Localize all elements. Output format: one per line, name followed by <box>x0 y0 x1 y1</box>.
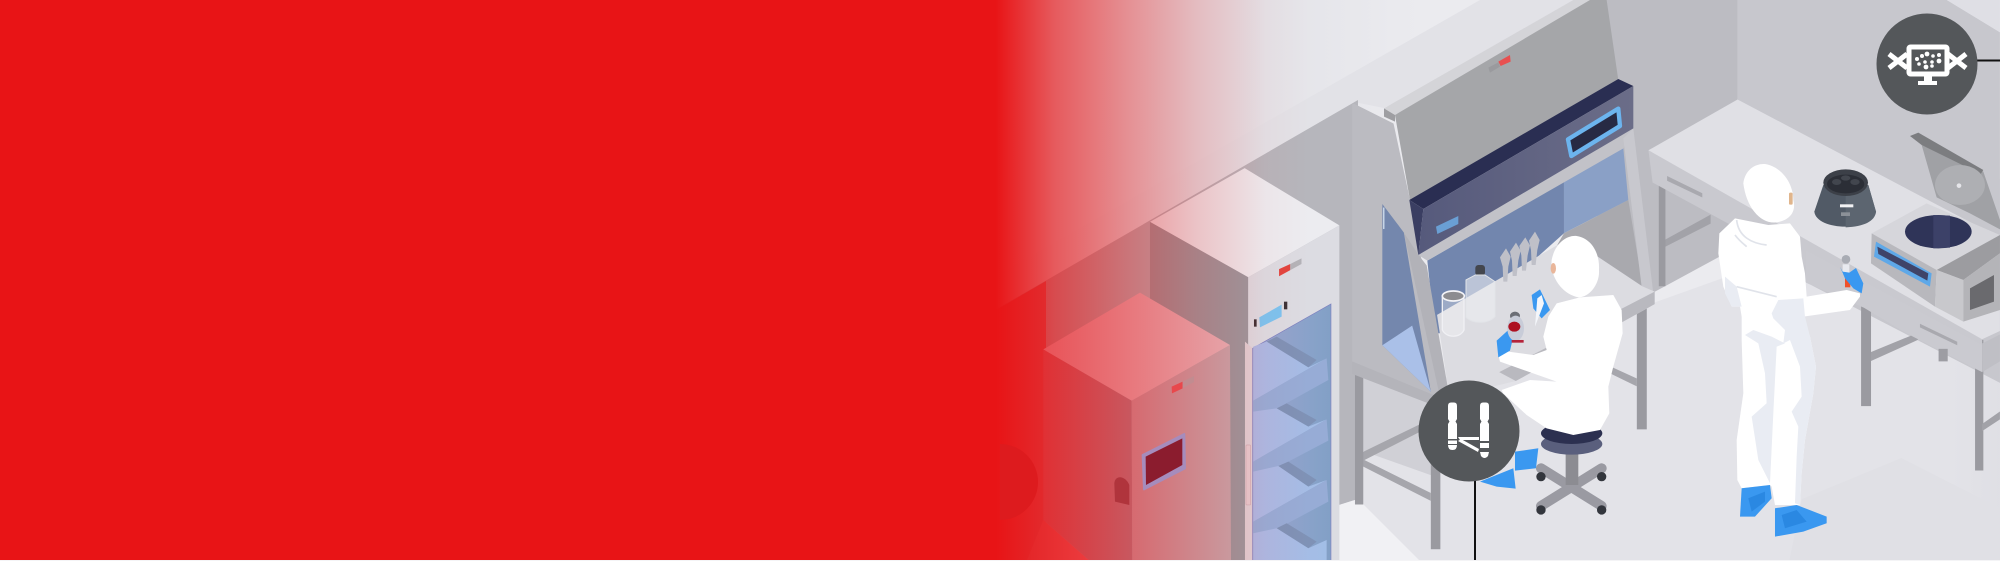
bottle <box>1466 265 1495 322</box>
shelf 1 <box>1267 337 1317 367</box>
seated scientist <box>1480 236 1623 515</box>
sash <box>1418 128 1633 261</box>
left glove <box>1497 330 1513 357</box>
icon: chromosome pair <box>1448 402 1489 458</box>
hood <box>1552 236 1599 297</box>
red wall near the fade edge <box>996 281 1046 561</box>
bottom edge highlight <box>0 560 2000 561</box>
shoe covers <box>1740 485 1827 537</box>
low cabinet <box>1027 293 1231 561</box>
stool <box>1536 423 1606 515</box>
light floor corner <box>1339 499 1420 561</box>
hood upper structure <box>1384 0 1653 333</box>
floor <box>1350 179 2000 561</box>
side panel <box>1352 104 1449 404</box>
icon: monitor <box>1909 47 1947 85</box>
callout: monitor with chromosomes <box>1876 14 2000 114</box>
indicator <box>1488 62 1500 73</box>
glove <box>1840 267 1863 293</box>
shelf 3 <box>1278 462 1317 487</box>
face <box>1789 193 1793 205</box>
back wall left <box>900 100 1358 561</box>
hood <box>1743 164 1794 223</box>
suit shading <box>1725 277 1816 505</box>
suit <box>1498 295 1623 435</box>
bench legs <box>1659 182 2000 471</box>
navy strip and panel <box>1409 79 1633 255</box>
cabinet legs and base <box>1355 304 1647 549</box>
tall glass door fridge <box>1150 168 1339 561</box>
beaker <box>1442 291 1464 336</box>
subtle half circle in fade <box>1000 444 1038 520</box>
shoe covers <box>1480 448 1538 489</box>
centrifuge lid <box>1910 133 2000 229</box>
red gradient overlay <box>0 0 1310 561</box>
top band and lip <box>1384 0 1595 115</box>
callout: chromosome marker <box>1418 380 1520 561</box>
right glove and pipette <box>1532 289 1550 327</box>
work surface <box>1437 238 1655 397</box>
waist and collar lines <box>1735 220 1777 297</box>
shelf 4 <box>1277 523 1317 548</box>
centrifuge body <box>1871 203 2000 322</box>
suit <box>1718 218 1860 505</box>
icon: crossed strands <box>1889 54 1966 68</box>
interior back <box>1427 148 1643 333</box>
grey front <box>1395 0 1618 200</box>
rotor <box>1814 169 1876 227</box>
pipette rack <box>1500 232 1540 282</box>
sample tube <box>1842 255 1850 287</box>
face <box>1551 263 1556 274</box>
shelf 2 <box>1277 403 1317 427</box>
bench objects behind scientist <box>1442 232 1540 336</box>
side window <box>1382 204 1431 392</box>
upper wall band <box>1000 0 1600 307</box>
laboratory scene <box>1352 104 1647 549</box>
right bench <box>1648 99 2000 471</box>
centrifuge area <box>1814 133 2000 322</box>
standing scientist <box>1718 164 1863 537</box>
hood lower structure <box>1352 204 1655 411</box>
left pillar <box>1404 233 1449 406</box>
flask <box>1507 312 1524 343</box>
